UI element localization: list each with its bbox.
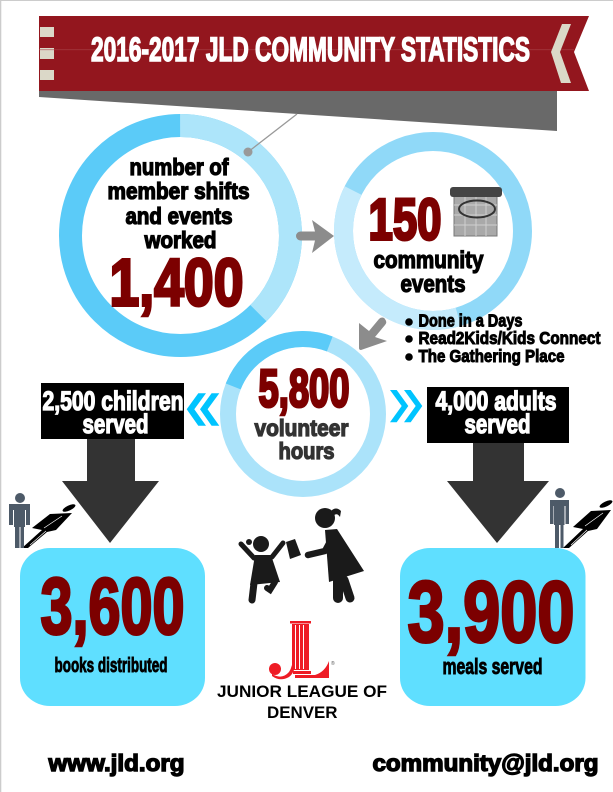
arrow: right	[296, 220, 334, 253]
title banner	[39, 16, 589, 131]
ring: volunteer hours	[205, 316, 401, 512]
text: volunteer hours: 5,800	[258, 360, 350, 418]
logo text: DENVER	[267, 704, 338, 722]
adult figure	[308, 508, 364, 598]
text: community events: events	[400, 271, 466, 298]
text: member shifts: and events	[126, 203, 232, 229]
column: adults served: served	[464, 409, 530, 439]
banner chevron	[551, 24, 571, 83]
icon: child and adult	[241, 508, 364, 600]
logo text	[217, 683, 387, 722]
number: 3,600: 3,600	[40, 562, 184, 650]
chevrons: left	[187, 393, 219, 426]
text: community events: community	[374, 247, 484, 274]
text: member shifts: worked	[144, 227, 216, 253]
arrow: down-left	[359, 318, 387, 350]
text: community events: 150	[368, 188, 442, 252]
chevrons: right	[390, 390, 422, 422]
icon: person with shadow, right	[550, 488, 613, 548]
text: volunteer hours: volunteer	[254, 415, 348, 441]
text: volunteer hours	[254, 360, 350, 464]
caption: books distributed	[54, 654, 168, 677]
text: member shifts	[108, 154, 250, 320]
label box	[41, 383, 184, 439]
column: children served: served	[82, 409, 148, 439]
icon: calendar	[450, 187, 502, 236]
text: member shifts: member shifts	[108, 178, 250, 204]
panel: meals served	[400, 548, 586, 706]
connector line from banner	[244, 114, 297, 156]
text: community events	[368, 188, 484, 298]
column: children served	[41, 383, 184, 543]
child figure	[241, 536, 301, 600]
list of event programs	[405, 310, 601, 366]
arrow: down to books	[62, 439, 159, 543]
list of event programs: The Gathering Place	[418, 346, 565, 366]
banner shadow	[39, 91, 557, 131]
number: 1,400: 1,400	[110, 246, 244, 320]
text: member shifts: number of	[130, 154, 229, 180]
label text: 2,500 children	[42, 386, 184, 416]
logo text: JUNIOR LEAGUE OF	[217, 683, 387, 701]
ring: community events	[322, 120, 544, 342]
logo: Junior League: ®	[331, 660, 335, 667]
ring: member shifts	[70, 126, 290, 346]
banner ribbon	[39, 16, 589, 91]
footer: email: community@jld.org	[372, 750, 598, 776]
text: volunteer hours: hours	[278, 438, 334, 464]
icon: person with shadow, left	[9, 493, 76, 548]
logo: Junior League	[269, 621, 335, 679]
label box	[427, 387, 569, 443]
list of event programs: Done in a Days	[418, 310, 523, 330]
caption: meals served	[442, 654, 542, 679]
column: adults served	[427, 386, 569, 543]
footer: website: www.jld.org	[47, 750, 184, 776]
label text: 4,000 adults	[436, 386, 556, 416]
panel: books distributed	[20, 548, 205, 706]
banner stitching	[40, 27, 54, 80]
arrow: down to meals	[447, 443, 549, 543]
